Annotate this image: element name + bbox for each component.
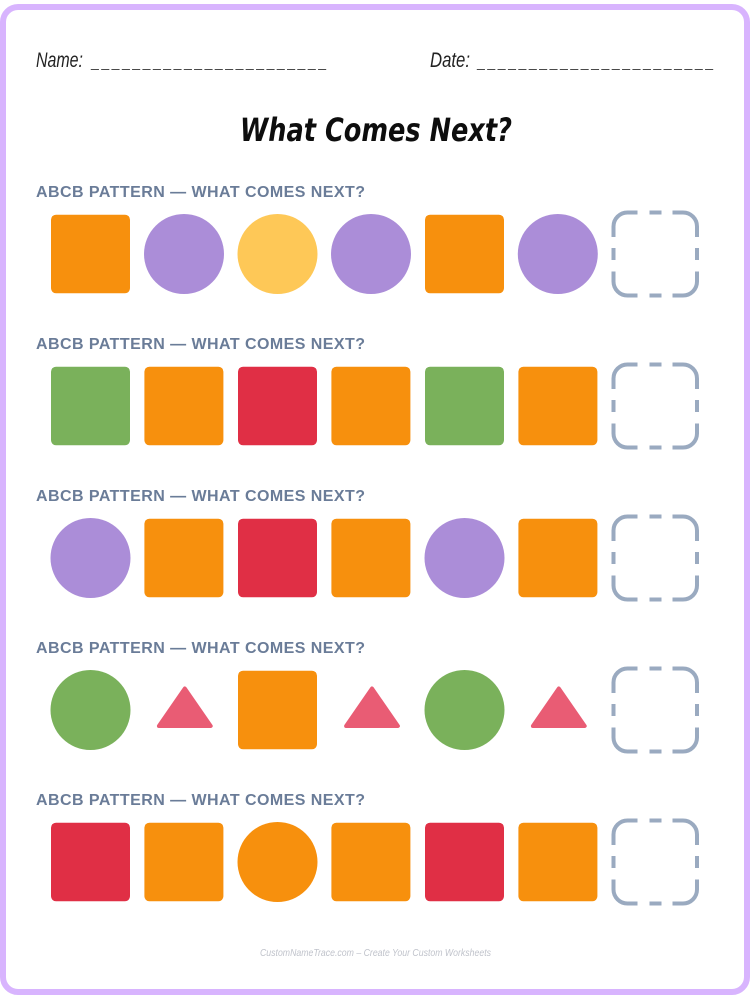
row 3 label: ABCB PATTERN — WHAT COMES NEXT? <box>36 488 365 505</box>
empty answer box <box>614 212 697 296</box>
pink triangle <box>533 688 585 726</box>
row 2 label: ABCB PATTERN — WHAT COMES NEXT? <box>36 336 365 353</box>
orange square <box>518 519 597 597</box>
date field: Date: <box>430 49 470 72</box>
orange circle <box>238 822 318 902</box>
orange square <box>144 519 223 597</box>
pattern row 3 <box>36 488 697 600</box>
pattern row 2 <box>36 336 697 448</box>
name field: _______________________ <box>90 54 326 70</box>
row 4 label: ABCB PATTERN — WHAT COMES NEXT? <box>36 640 365 657</box>
purple circle <box>424 518 504 598</box>
footer credit: CustomNameTrace.com – Create Your Custom Worksheets <box>260 947 492 959</box>
green circle <box>50 670 130 750</box>
pink triangle <box>346 688 398 726</box>
pattern row 5 <box>36 792 697 904</box>
green circle <box>424 670 504 750</box>
orange square <box>144 367 223 445</box>
pattern row 1 <box>36 184 697 296</box>
name field <box>36 49 326 72</box>
empty answer box <box>614 516 697 600</box>
orange square <box>51 215 130 293</box>
row 5 label: ABCB PATTERN — WHAT COMES NEXT? <box>36 792 365 809</box>
date field: _______________________ <box>476 54 713 70</box>
pink triangle <box>159 688 211 726</box>
purple circle <box>50 518 130 598</box>
orange square <box>144 823 223 901</box>
empty answer box <box>614 364 697 448</box>
orange square <box>331 367 410 445</box>
red square <box>238 519 317 597</box>
red square <box>425 823 504 901</box>
yellow circle <box>238 214 318 294</box>
orange square <box>331 823 410 901</box>
pattern row 4 <box>36 640 697 752</box>
green square <box>51 367 130 445</box>
row 1 label: ABCB PATTERN — WHAT COMES NEXT? <box>36 184 365 201</box>
green square <box>425 367 504 445</box>
orange square <box>238 671 317 749</box>
orange square <box>518 823 597 901</box>
orange square <box>518 367 597 445</box>
name field: Name: <box>36 49 83 72</box>
red square <box>51 823 130 901</box>
orange square <box>425 215 504 293</box>
red square <box>238 367 317 445</box>
purple circle <box>518 214 598 294</box>
date field <box>430 49 713 72</box>
empty answer box <box>614 668 697 752</box>
orange square <box>331 519 410 597</box>
purple circle <box>144 214 224 294</box>
title: What Comes Next? <box>240 111 512 149</box>
purple circle <box>331 214 411 294</box>
empty answer box <box>614 820 697 904</box>
